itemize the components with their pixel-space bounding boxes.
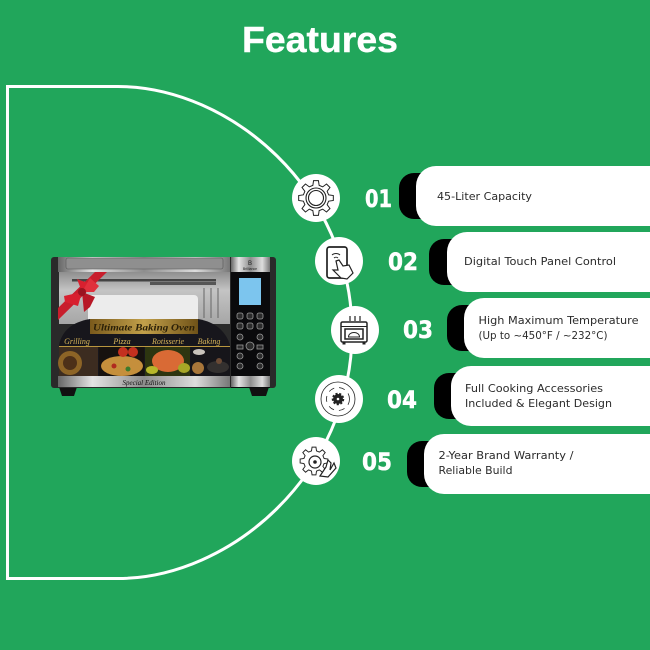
oven banner bbox=[59, 319, 230, 376]
label 03: High Maximum Temperature bbox=[478, 314, 639, 327]
label 05 bbox=[438, 449, 574, 477]
number 04: 04 bbox=[387, 386, 417, 414]
number 03: 03 bbox=[403, 316, 433, 344]
icon: elegant design dial bbox=[315, 375, 363, 423]
number 02: 02 bbox=[388, 248, 418, 276]
oven category labels: Rotisserie bbox=[151, 337, 184, 346]
oven top trim bbox=[58, 257, 230, 272]
oven body bbox=[51, 257, 276, 388]
card 03 bbox=[464, 298, 650, 358]
oven window bbox=[59, 272, 230, 324]
oven bottom trim bbox=[58, 376, 230, 387]
number 05: 05 bbox=[362, 448, 392, 476]
oven banner label bbox=[90, 319, 198, 334]
step 03 bbox=[331, 298, 650, 358]
card 01 bbox=[416, 166, 650, 226]
oven control panel bbox=[231, 257, 270, 388]
step 01 bbox=[292, 166, 650, 226]
oven display bbox=[239, 278, 261, 305]
black tab 01 bbox=[399, 173, 439, 219]
oven photo: Brilliance bbox=[243, 267, 257, 271]
arc outline bbox=[8, 86, 352, 578]
label 03 bbox=[478, 314, 639, 342]
icon: gear with hand bbox=[292, 437, 340, 485]
label 04: Full Cooking Accessories bbox=[465, 382, 603, 395]
label 02: Digital Touch Panel Control bbox=[464, 255, 616, 268]
oven category labels: Pizza bbox=[112, 337, 131, 346]
step 02 bbox=[315, 232, 650, 292]
label 05: Reliable Build bbox=[438, 464, 512, 477]
label 01: 45-Liter Capacity bbox=[437, 190, 532, 203]
label 04: Included & Elegant Design bbox=[465, 397, 612, 410]
oven photo: Ultimate Baking Oven bbox=[93, 324, 195, 334]
oven photo bbox=[51, 257, 276, 396]
oven feet bbox=[59, 387, 269, 396]
step 05 bbox=[292, 434, 650, 494]
title: Features bbox=[242, 19, 398, 60]
oven buttons bbox=[237, 313, 263, 369]
label 05: 2-Year Brand Warranty / bbox=[438, 449, 574, 462]
icon: gear bbox=[292, 174, 340, 222]
card 02 bbox=[447, 232, 650, 292]
number 01: 01 bbox=[365, 185, 392, 213]
oven category labels: Grilling bbox=[64, 337, 90, 346]
bow bbox=[58, 272, 107, 320]
black tab 05 bbox=[407, 441, 447, 487]
oven category labels bbox=[64, 337, 220, 346]
icon: oven bbox=[331, 306, 379, 354]
oven food photos bbox=[58, 346, 230, 376]
card 05 bbox=[424, 434, 650, 494]
oven category labels: Baking bbox=[198, 337, 220, 346]
card 04 bbox=[451, 366, 650, 426]
black tab 02 bbox=[429, 239, 469, 285]
oven photo: B bbox=[248, 261, 252, 267]
icon: touch panel bbox=[315, 237, 363, 285]
black tab 03 bbox=[447, 305, 487, 351]
label 03: (Up to ~450°F / ~232°C) bbox=[478, 329, 608, 342]
oven photo: Special Edition bbox=[123, 379, 166, 387]
step 04 bbox=[315, 366, 650, 426]
black tab 04 bbox=[434, 373, 474, 419]
label 04 bbox=[465, 382, 612, 410]
